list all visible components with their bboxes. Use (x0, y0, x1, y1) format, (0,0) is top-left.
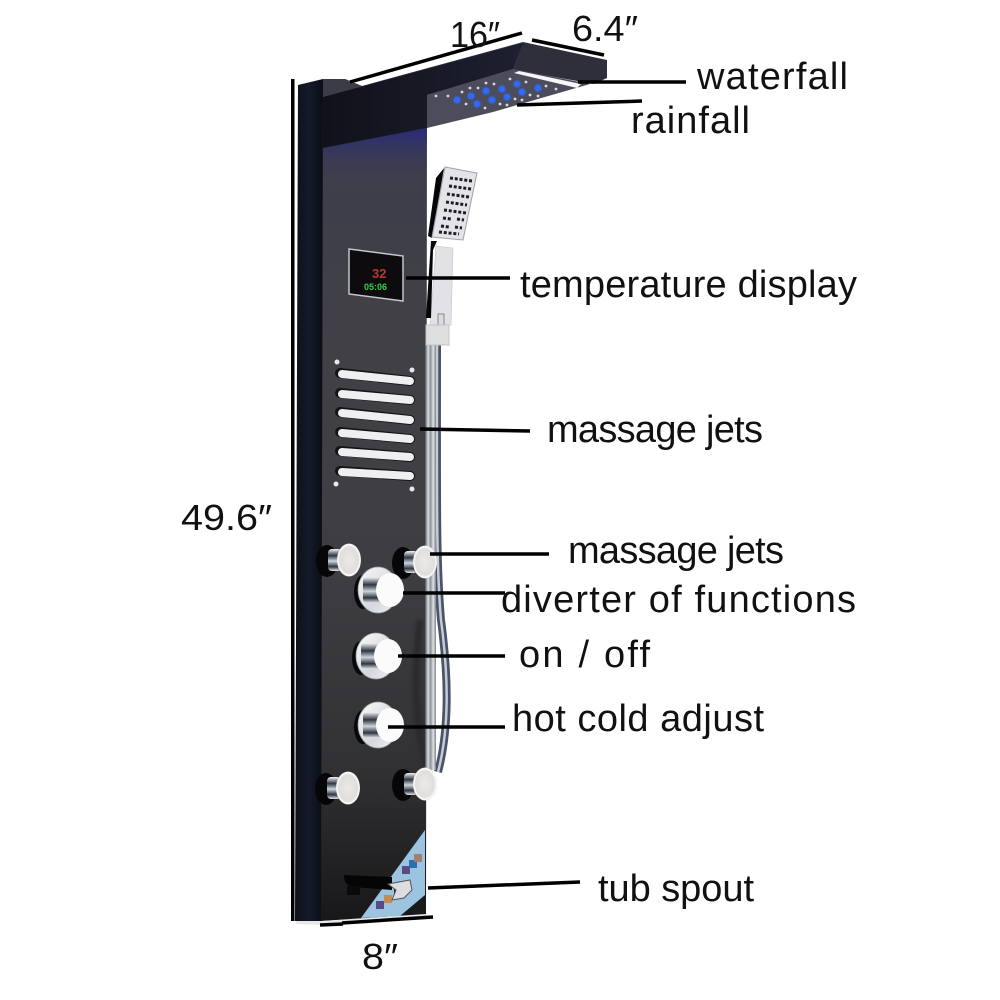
dimension: 6.4 inch depth (532, 8, 638, 55)
dimension: 49.6 inch height: 49.6″ (181, 497, 272, 538)
dimension: 16 inch width (350, 14, 522, 82)
panel: shower column (295, 42, 523, 925)
rainfall shower head (427, 42, 607, 128)
dimension: 8 inch base: 8″ (362, 936, 398, 977)
temperature display (349, 249, 403, 301)
callout: on / off: on / off (519, 634, 650, 676)
hand shower (426, 167, 477, 345)
callout: tub spout: tub spout (598, 868, 754, 910)
callout: rainfall (517, 100, 750, 142)
callout: massage jets upper: massage jets (547, 409, 763, 451)
waterfall light strip (514, 71, 581, 88)
temperature display: 05:06 (364, 282, 387, 292)
control knobs (352, 567, 404, 748)
callout: waterfall: waterfall (696, 56, 848, 98)
tub spout (344, 875, 412, 900)
dimension: 8 inch base (320, 917, 433, 977)
round massage jets (315, 544, 437, 805)
blue sticker (361, 830, 425, 918)
massage jet strips (334, 360, 414, 492)
callout: rainfall: rainfall (631, 100, 750, 142)
dimension: 6.4 inch depth: 6.4″ (572, 8, 638, 49)
callout: temperature display: temperature display (520, 264, 857, 306)
hose (416, 345, 447, 772)
callout: hot cold adjust: hot cold adjust (512, 698, 764, 740)
temperature display: 32 (372, 266, 386, 281)
dimension: 16 inch width: 16″ (450, 14, 500, 55)
rainfall LED nozzles (453, 80, 542, 108)
callout: diverter of functions: diverter of functions (501, 579, 856, 621)
callout: massage jets lower: massage jets (568, 530, 784, 572)
dimension: 49.6 inch height (181, 79, 294, 921)
callout: tub spout (428, 868, 754, 910)
